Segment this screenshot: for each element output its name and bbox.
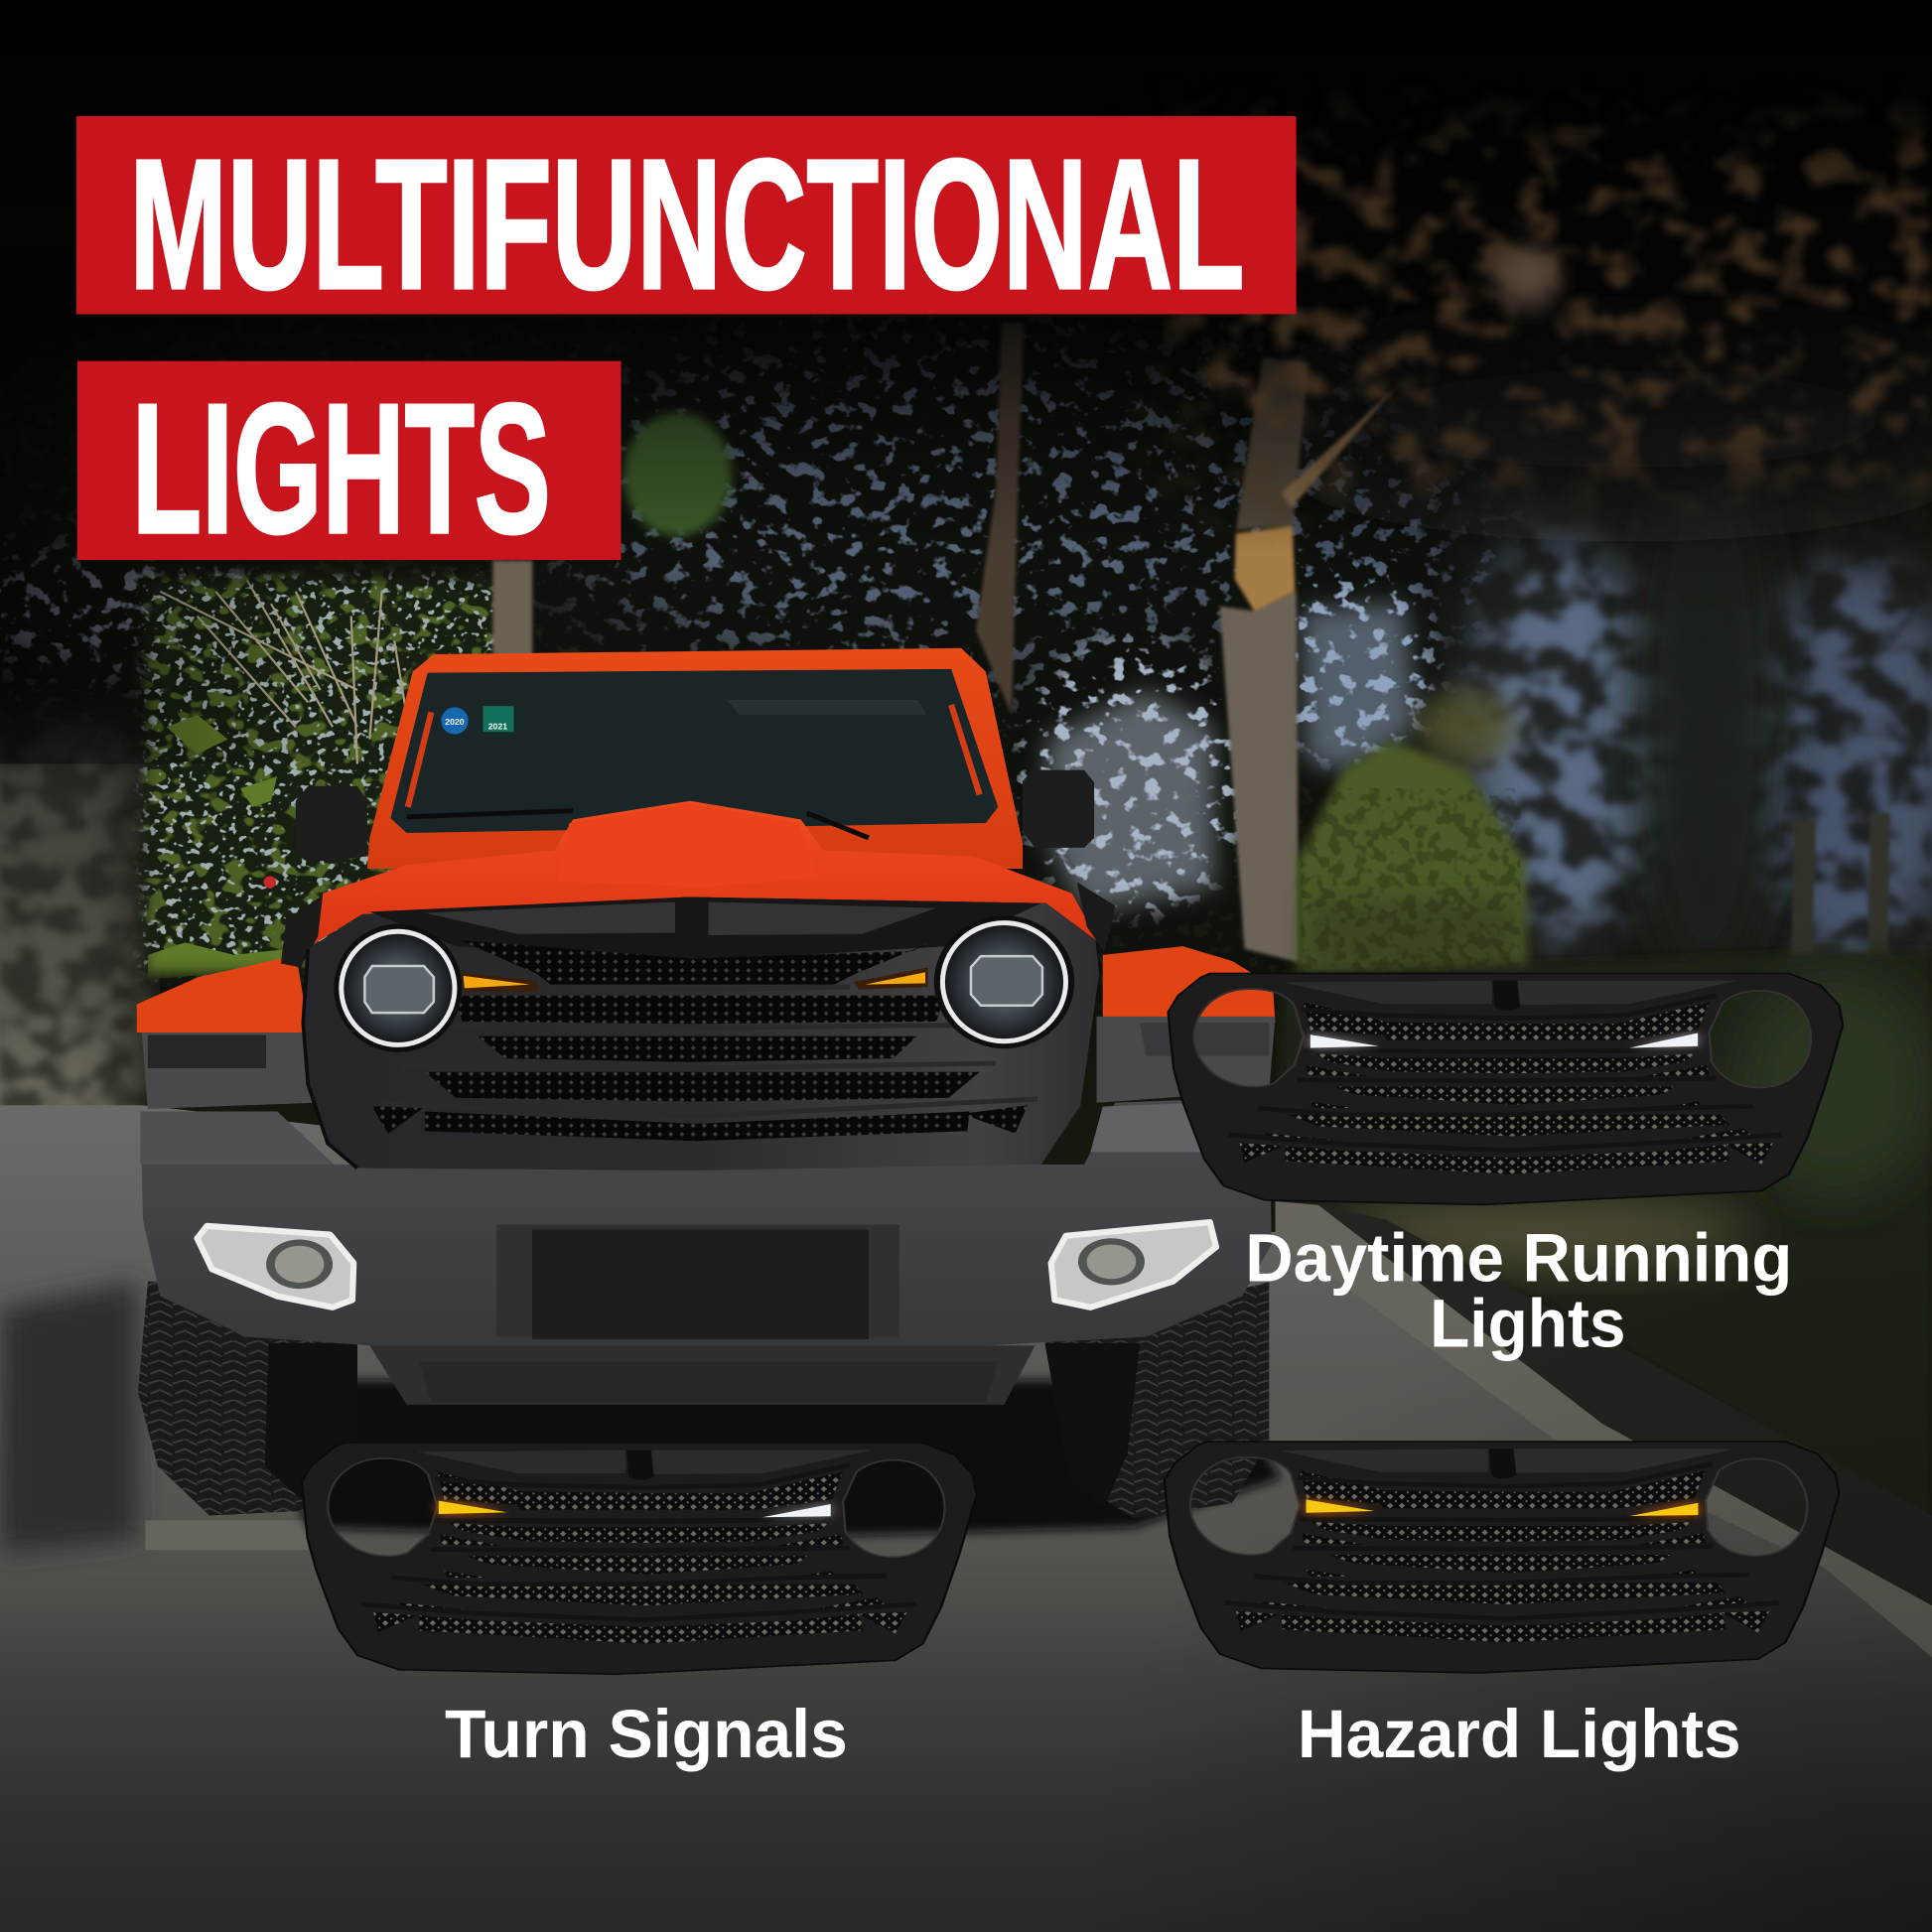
- right roadside foliage: [1282, 949, 1932, 1528]
- grille product: turn signals: [302, 1443, 977, 1674]
- tree masses on the right: [1417, 483, 1932, 959]
- black grille housing: [303, 897, 1099, 1171]
- brown canopy and top darkness: [0, 0, 1932, 763]
- label: daytime running lights: Lights: [1430, 1286, 1625, 1361]
- sky behind canopy: [0, 357, 1516, 911]
- grille product: daytime running lights: [1169, 973, 1843, 1204]
- icon: right fog light: [1051, 1222, 1216, 1308]
- label: turn signals: Turn Signals: [445, 1697, 848, 1772]
- orange cab and windshield frame: 2020: [445, 717, 465, 727]
- label: daytime running lights: [1245, 1221, 1792, 1361]
- blurred left hedge: [0, 727, 160, 1106]
- tree trunks: [492, 323, 1890, 973]
- side grey panels: [142, 1017, 1276, 1109]
- title banner: multifunctional: MULTIFUNCTIONAL: [129, 121, 1244, 328]
- side mirrors: [296, 770, 1094, 863]
- label: hazard lights: Hazard Lights: [1298, 1697, 1741, 1772]
- grille product: hazard lights: [1165, 1442, 1839, 1673]
- icon: right headlight: [934, 915, 1074, 1048]
- orange fenders: [137, 946, 1276, 1033]
- title banner: lights: LIGHTS: [132, 365, 551, 572]
- green bush: [1297, 690, 1525, 986]
- orange hood with scoop: [302, 801, 1099, 951]
- jeep front view: [137, 648, 1276, 1518]
- icon: left fog light: [198, 1226, 353, 1308]
- road: [0, 1105, 1932, 1932]
- hood hinge brackets: [281, 883, 1115, 967]
- title banner: lights: [77, 361, 621, 572]
- orange cab and windshield frame: [367, 648, 1023, 869]
- foliage canopy: [0, 320, 1522, 975]
- sky patches on the right: [1047, 536, 1932, 973]
- icon: tires: [138, 1282, 1269, 1518]
- label: daytime running lights: Daytime Running: [1245, 1221, 1792, 1297]
- title banner: multifunctional: [76, 116, 1297, 328]
- icon: amber grille lights: [461, 967, 928, 992]
- sharp foliage behind the jeep: [135, 568, 495, 985]
- icon: left headlight: [334, 924, 462, 1052]
- bumper: [140, 1097, 1272, 1405]
- orange cab and windshield frame: 2021: [488, 722, 507, 732]
